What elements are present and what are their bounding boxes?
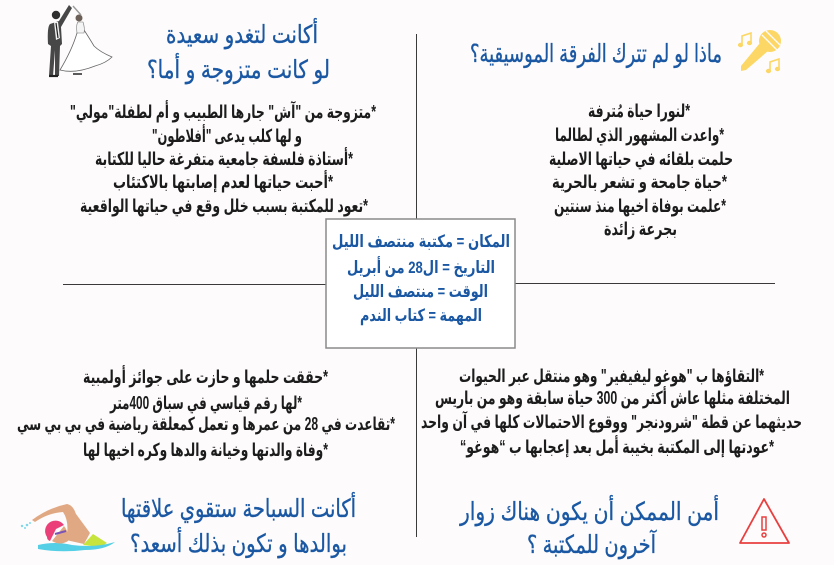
- heading: top-right: ماذا لو لم تترك الفرقة الموسيقية؟: [470, 40, 722, 69]
- text block: bottom-left details: *حققت حلمها و حازت على جوائز أولمبية: [83, 365, 328, 388]
- panel: bottom-right, other visitors: [421, 366, 802, 560]
- panel: centre setting box: المهمة = كتاب الندم: [360, 306, 482, 326]
- text block: bottom-left details: *وفاة والدتها وخيانة والدها وكره اخيها لها: [83, 440, 328, 461]
- icon: dancing wedding couple: [48, 5, 112, 76]
- heading: bottom-left: أكانت السباحة ستقوي علاقتها: [121, 491, 356, 524]
- text block: bottom-left details: *لها رقم قياسي في سباق 400متر: [109, 393, 302, 414]
- panel: bottom-left, swimming: [17, 365, 395, 559]
- text block: top-right details: حلمت بلقائه في حياتها الاصلية: [549, 149, 733, 170]
- panel: top-right, music band: [470, 30, 781, 240]
- text block: top-right details: *واعدت المشهور الذي لطالما: [555, 125, 724, 146]
- text block: top-left details: *أستاذة فلسفة جامعية متفرغة حاليا للكتابة: [95, 147, 353, 170]
- text block: bottom-right details: [421, 366, 802, 458]
- text block: top-right details: *لنورا حياة مُترفة: [588, 101, 690, 122]
- text block: top-right details: *حياة جامحة و تشعر بالحرية: [552, 172, 727, 193]
- heading: top-left: [147, 17, 330, 85]
- text block: top-right details: *علمت بوفاة اخيها منذ سنتين: [554, 196, 726, 217]
- heading: top-left: لو كانت متزوجة و أما؟: [147, 52, 330, 85]
- text block: top-left details: *متزوجة من "آش" جارها الطبيب و أم لطفلة"مولي": [70, 100, 376, 123]
- text block: top-left details: *تعود للمكتبة بسبب خلل وقع في حياتها الواقعية: [80, 196, 368, 217]
- icon: yellow microphone with music notes: [738, 30, 781, 73]
- heading: bottom-right: [458, 494, 719, 560]
- text block: top-left details: *أحبت حياتها لعدم إصابتها بالاكتئاب: [113, 170, 333, 193]
- text block: bottom-left details: *تقاعدت في 28 من عمرها و تعمل كمعلقة رياضية في بي بي سي: [17, 414, 395, 435]
- panel: centre setting box: المكان = مكتبة منتصف الليل: [332, 232, 510, 251]
- panel: top-left, married and mother: [48, 5, 376, 217]
- panel: centre setting box: [326, 219, 515, 348]
- text block: top-right details: بجرعة زائدة: [604, 219, 677, 240]
- panel: centre setting box: الوقت = منتصف الليل: [353, 282, 488, 302]
- panel: centre setting box: التاريخ = ال28 من أبريل: [347, 256, 495, 278]
- heading: bottom-right: آخرون للمكتبة ؟: [527, 529, 657, 560]
- icon: red warning triangle: [740, 499, 789, 543]
- text block: bottom-left details: [17, 365, 395, 461]
- heading: top-left: أكانت لتغدو سعيدة: [166, 17, 318, 50]
- text block: top-left details: [70, 100, 376, 217]
- text block: top-right details: [549, 101, 733, 240]
- heading: bottom-left: بوالدها و تكون بذلك أسعد؟: [130, 526, 347, 559]
- heading: bottom-left: [121, 491, 356, 559]
- icon: swimmer: [21, 504, 115, 551]
- heading: bottom-right: أمن الممكن أن يكون هناك زوار: [458, 494, 719, 527]
- text block: top-left details: و لها كلب يدعى "أفلاطون": [152, 124, 302, 147]
